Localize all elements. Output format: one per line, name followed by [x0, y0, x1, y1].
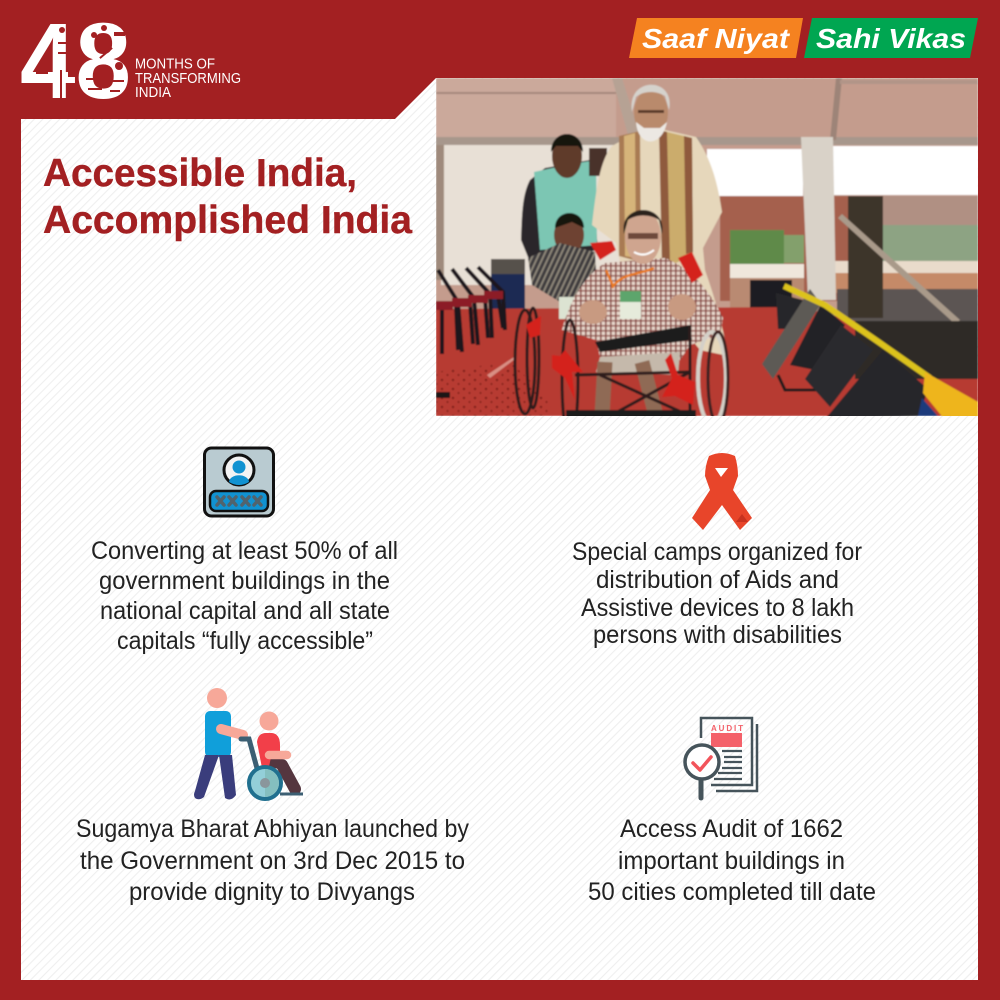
tag: Saaf Niyat: [629, 18, 803, 58]
text: converting buildings: national capital and all state: [100, 597, 390, 625]
tag: Sahi Vikas: Sahi Vikas: [816, 23, 966, 54]
text: converting buildings: capitals “fully accessible”: [117, 627, 373, 655]
icon: person pushing wheelchair: [194, 688, 303, 799]
text: converting buildings: government buildings in the: [99, 567, 390, 595]
logo: 48 months of transforming India: MONTHS OF: [135, 56, 215, 72]
title: [43, 152, 412, 242]
logo: 48 months of transforming India: TRANSFORMING: [135, 70, 241, 87]
text: converting buildings: Converting at least 50% of all: [91, 537, 398, 565]
icon: audit document and magnifier: AUDIT: [711, 724, 743, 733]
text: special camps: Assistive devices to 8 lakh: [581, 594, 854, 622]
icon: audit document and magnifier: [685, 718, 757, 798]
icon: red ribbon: [692, 453, 752, 530]
text: access audit: important buildings in: [618, 847, 845, 875]
text: special camps: distribution of Aids and: [596, 566, 839, 594]
tag: Saaf Niyat: Saaf Niyat: [642, 23, 791, 54]
title: Accomplished India: [43, 199, 412, 242]
text: access audit: [588, 815, 876, 906]
text: special camps: [572, 538, 862, 649]
logo: 48 months of transforming India: 48: [20, 0, 131, 121]
text: special camps: Special camps organized for: [572, 538, 862, 566]
text: Sugamya Bharat Abhiyan: [76, 815, 469, 906]
photo: wheelchair users at the event: [436, 78, 978, 440]
text: access audit: Access Audit of 1662: [620, 815, 843, 843]
logo: 48 months of transforming India: INDIA: [135, 84, 171, 101]
title: Accessible India,: [43, 152, 357, 195]
text: special camps: persons with disabilities: [593, 621, 842, 649]
text: converting buildings: [91, 537, 398, 655]
text: Sugamya Bharat Abhiyan: the Government on 3rd Dec 2015 to: [80, 847, 465, 875]
tag: Sahi Vikas: [804, 18, 978, 58]
text: Sugamya Bharat Abhiyan: provide dignity to Divyangs: [129, 878, 415, 906]
text: access audit: 50 cities completed till date: [588, 878, 876, 906]
text: Sugamya Bharat Abhiyan: Sugamya Bharat Abhiyan launched by: [76, 815, 469, 843]
logo: 48 months of transforming India: [20, 0, 241, 121]
icon: accessible ID card: [204, 448, 274, 516]
